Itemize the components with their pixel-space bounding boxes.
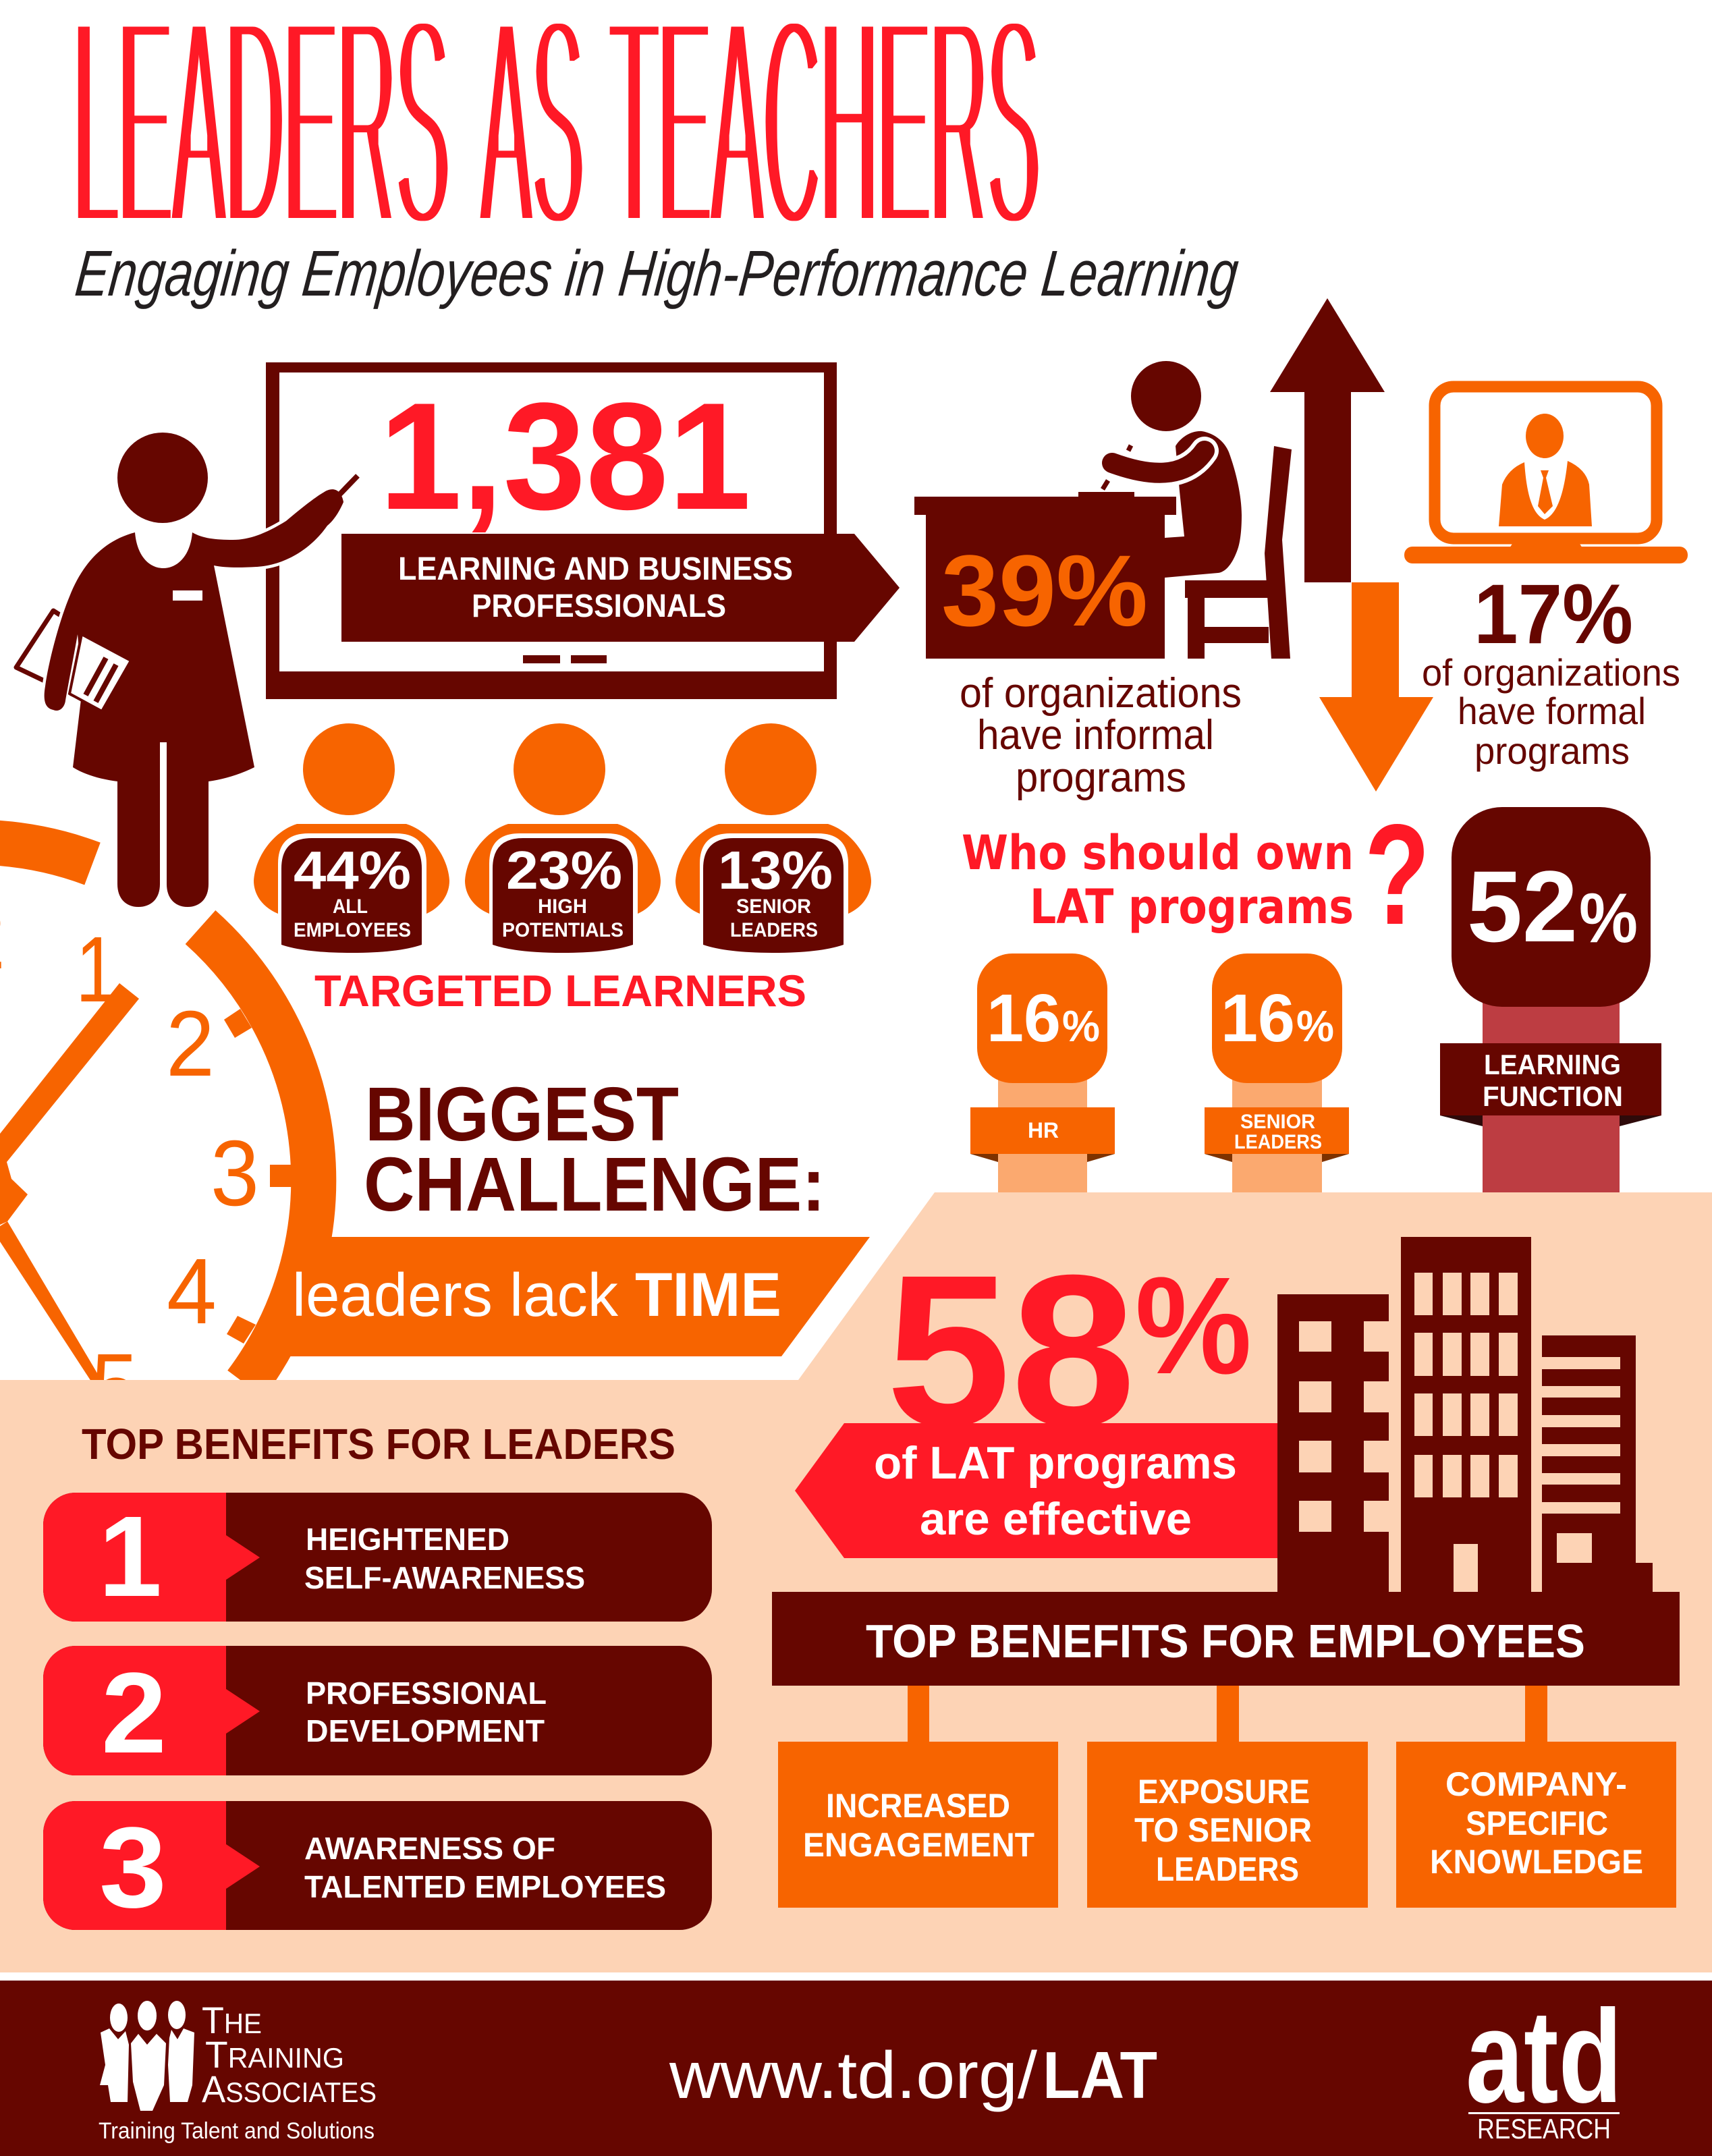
list item: benefit 2 (43, 1646, 712, 1777)
bar: senior leaders 16%: SENIOR (1240, 1111, 1315, 1133)
heading: biggest challenge: CHALLENGE: (364, 1142, 825, 1227)
list item: benefit 3: AWARENESS OF (304, 1831, 555, 1866)
clock illustration: 4 (167, 1240, 217, 1344)
panel: presentation board (266, 362, 900, 699)
heading: who should own LAT programs: LAT programs (1030, 879, 1354, 935)
text: informal programs: programs (1016, 754, 1186, 801)
person: high potentials: POTENTIALS (502, 919, 624, 941)
person: all employees (254, 723, 449, 953)
logo: atd research: RESEARCH (1477, 2113, 1611, 2145)
box: company-specific knowledge (1396, 1686, 1676, 1908)
logo: atd research: atd (1466, 1983, 1622, 2130)
box: company-specific knowledge: SPECIFIC (1466, 1804, 1608, 1842)
box: exposure to senior leaders: EXPOSURE (1138, 1773, 1310, 1811)
box: company-specific knowledge: KNOWLEDGE (1430, 1843, 1643, 1881)
stat: 58% (886, 1229, 1252, 1471)
bar: learning function 52%: FUNCTION (1483, 1080, 1623, 1112)
stat: 58%: 58 (886, 1229, 1136, 1471)
heading: targeted learners: TARGETED LEARNERS (314, 966, 806, 1016)
stat: 58%: % (1135, 1248, 1252, 1403)
person: all employees: ALL (333, 895, 368, 918)
text: informal programs (960, 670, 1242, 801)
bar: learning function 52%: 52 (1467, 850, 1578, 963)
person: senior leaders: LEADERS (730, 919, 818, 941)
list item: benefit 3: TALENTED EMPLOYEES (304, 1869, 666, 1904)
panel: peach benefits background (0, 1192, 1712, 1972)
banner: of LAT programs are effective: are effective (920, 1493, 1192, 1545)
logo: the training associates (99, 1999, 377, 2144)
text: formal programs: of organizations (1422, 651, 1680, 694)
stat: 1,381: 1,381 (379, 370, 751, 541)
person: high potentials (465, 723, 661, 953)
banner: learning and business professionals: LEARNING AND BUSINESS (398, 551, 793, 587)
list item: benefit 3: 3 (99, 1804, 167, 1932)
list item: benefit 2: DEVELOPMENT (306, 1713, 545, 1748)
bar: learning function 52%: % (1579, 879, 1638, 958)
heading: top benefits for employees (772, 1592, 1680, 1686)
box: exposure to senior leaders: TO SENIOR (1134, 1811, 1312, 1849)
bar: senior leaders 16%: 16 (1221, 980, 1295, 1056)
arrow: down (1319, 582, 1433, 792)
person: senior leaders: SENIOR (736, 895, 811, 918)
banner: learning and business professionals (341, 534, 900, 642)
list item: benefit 1: 1 (99, 1493, 162, 1621)
banner: of LAT programs are effective: of LAT programs (874, 1437, 1237, 1489)
person: high potentials: 23% (506, 840, 622, 900)
box: increased engagement: INCREASED (826, 1787, 1010, 1825)
icon: three figures (100, 2001, 194, 2111)
person: senior leaders: 13% (718, 840, 833, 900)
box: increased engagement (778, 1686, 1058, 1908)
banner: of LAT programs are effective (795, 1423, 1277, 1558)
bar: senior leaders 16% (1205, 953, 1349, 1193)
heading: top benefits for employees: TOP BENEFITS FOR EMPLOYEES (866, 1615, 1585, 1667)
bar: HR 16%: HR (1028, 1118, 1059, 1142)
text: informal programs: have informal (977, 712, 1214, 758)
text: formal programs (1422, 568, 1680, 772)
logo: the training associates: TRAINING (205, 2033, 344, 2076)
icon group: targeted learners people (254, 723, 871, 953)
logo: the training associates: ASSOCIATES (202, 2068, 377, 2110)
list item: benefit 2: PROFESSIONAL (306, 1676, 547, 1711)
list item: benefit 2: 2 (101, 1649, 167, 1777)
bar: HR 16% (970, 953, 1115, 1193)
icon: laptop with presenter (1404, 387, 1688, 563)
bar: HR 16%: 16 (987, 980, 1061, 1056)
url: www.td.org/ (669, 2038, 1038, 2112)
icon: person writing at desk (914, 361, 1292, 659)
list item: benefit 1 (43, 1493, 712, 1622)
box: company-specific knowledge: COMPANY- (1445, 1765, 1627, 1803)
subtitle: Engaging Employees in High-Performance Learning (72, 238, 1242, 310)
stat: 39%: 39% (941, 534, 1148, 647)
heading: who should own LAT programs: Who should own (962, 825, 1354, 881)
bar: senior leaders 16%: % (1296, 1001, 1334, 1051)
text: formal programs: 17% (1474, 568, 1633, 661)
box: exposure to senior leaders (1087, 1686, 1368, 1908)
title (74, 0, 1040, 289)
heading: who should own LAT programs (962, 794, 1430, 954)
text: formal programs: have formal (1458, 690, 1646, 732)
clock illustration: 2 (166, 992, 215, 1096)
bar: learning function 52%: LEARNING (1484, 1049, 1621, 1080)
bar: learning function 52% (1440, 807, 1661, 1193)
list item: benefit 3 (43, 1801, 712, 1932)
list item: benefit 1: HEIGHTENED (306, 1522, 509, 1557)
banner: leaders lack time: leaders lack (292, 1262, 619, 1329)
text: informal programs: of organizations (960, 670, 1242, 717)
bar: HR 16%: % (1062, 1001, 1100, 1051)
icon: teacher figure (16, 433, 358, 907)
bar: senior leaders 16%: LEADERS (1234, 1131, 1322, 1153)
text: formal programs: programs (1474, 729, 1630, 772)
heading: biggest challenge: BIGGEST (365, 1072, 679, 1157)
panel: footer (0, 1981, 1712, 2156)
clock illustration: 1 (76, 918, 117, 1022)
banner: learning and business professionals: PROFESSIONALS (472, 588, 726, 624)
heading: biggest challenge (364, 1072, 825, 1227)
icon: office buildings (1277, 1237, 1653, 1592)
heading: who should own LAT programs: ? (1364, 794, 1430, 954)
arrow: up (1270, 298, 1385, 582)
person: all employees: 44% (294, 840, 411, 900)
person: all employees: EMPLOYEES (294, 919, 411, 941)
heading: top benefits for leaders: TOP BENEFITS FOR LEADERS (82, 1420, 675, 1468)
list item: benefit 1: SELF-AWARENESS (304, 1560, 585, 1595)
box: exposure to senior leaders: LEADERS (1156, 1850, 1299, 1888)
person: senior leaders (675, 723, 871, 953)
box: increased engagement: ENGAGEMENT (803, 1826, 1034, 1864)
logo: the training associates: Training Talent and Solutions (99, 2118, 375, 2144)
banner: leaders lack time: TIME (635, 1261, 781, 1329)
url: LAT (1043, 2038, 1157, 2112)
banner: leaders lack time (287, 1237, 870, 1356)
clock illustration: 5 (91, 1335, 138, 1439)
person: high potentials: HIGH (538, 895, 587, 918)
logo: the training associates: THE (202, 1999, 262, 2041)
clock illustration (0, 842, 314, 1439)
clock illustration: 3 (211, 1122, 259, 1225)
